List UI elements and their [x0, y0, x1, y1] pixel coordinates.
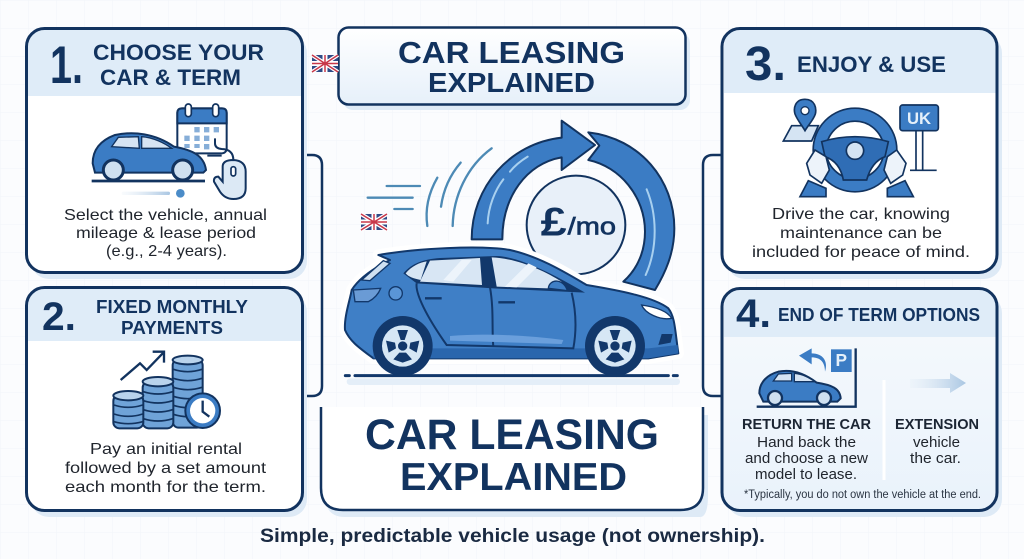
text: return the car option: and choose a new [745, 450, 868, 467]
text: return the car option: RETURN THE CAR [742, 416, 871, 433]
circular arrow [472, 121, 674, 290]
text: step 2 description: followed by a set amount [65, 460, 267, 477]
icon: car with calendar and mouse [92, 104, 246, 199]
heading: choose your car and term: CAR & TERM [100, 65, 241, 90]
car [345, 248, 678, 376]
icon: return car to parking [757, 348, 856, 407]
icon: return car to parking: P [836, 350, 847, 370]
panel 2: fixed monthly payments [26, 288, 307, 517]
payment circle: /mo [568, 214, 616, 241]
ground line [345, 376, 680, 385]
number 4: 4. [736, 292, 771, 336]
title box [338, 28, 690, 110]
text: step 3 description [752, 206, 970, 261]
title text: CAR LEASING [398, 35, 625, 70]
panel 3: enjoy and use [722, 28, 1002, 279]
illustration: car with monthly payment arrow [345, 121, 680, 385]
text: return the car option: Hand back the [757, 434, 856, 451]
title text: EXPLAINED [428, 67, 595, 98]
footnote: *Typically, you do not own the vehicle at the end. [744, 489, 981, 501]
heading: fixed monthly payments: FIXED MONTHLY [96, 297, 248, 317]
panel 4: end of term options [722, 288, 1002, 517]
panel 1: choose your car and term [26, 28, 307, 279]
lower title text [365, 411, 659, 499]
heading: enjoy and use: ENJOY & USE [797, 52, 946, 77]
icon: steering wheel with map pin and UK sign [783, 99, 938, 197]
heading: fixed monthly payments [96, 297, 248, 338]
text: step 1 description: mileage & lease period [76, 225, 256, 242]
connector: right bracket [703, 155, 722, 396]
text: step 3 description: Drive the car, knowing [772, 206, 950, 223]
heading: choose your car and term [93, 40, 264, 90]
text: step 2 description: each month for the term. [65, 479, 266, 496]
heading: end of term options: END OF TERM OPTIONS [778, 305, 980, 325]
text: extension option: the car. [910, 450, 961, 467]
lower title text: EXPLAINED [400, 456, 627, 499]
lower title box [321, 407, 708, 517]
payment circle [527, 176, 625, 274]
heading: fixed monthly payments: PAYMENTS [121, 318, 223, 338]
number 1: 1. [50, 36, 83, 95]
text: extension option: EXTENSION [895, 416, 979, 433]
text: return the car option: model to lease. [755, 466, 857, 483]
text: step 1 description [64, 207, 267, 260]
lower title text: CAR LEASING [365, 411, 659, 459]
tagline: Simple, predictable vehicle usage (not ownership). [260, 526, 765, 547]
number 3: 3. [745, 38, 786, 91]
text: extension option: vehicle [913, 434, 960, 451]
text: return the car option [742, 416, 871, 483]
icon: UK flag middle [361, 214, 387, 230]
text: step 1 description: (e.g., 2-4 years). [106, 243, 227, 260]
icon: extension arrow [910, 373, 966, 393]
connector: left bracket [302, 155, 322, 396]
text: step 1 description: Select the vehicle, annual [64, 207, 267, 224]
text: step 2 description: Pay an initial rental [90, 441, 242, 458]
icon: UK flag top [312, 55, 338, 72]
icon: steering wheel with map pin and UK sign: UK [907, 109, 931, 128]
text: extension option [895, 416, 979, 467]
motion lines [368, 148, 492, 226]
text: step 3 description: included for peace of mind. [752, 244, 970, 261]
title text [398, 35, 625, 98]
payment circle: £ [541, 200, 567, 244]
heading: choose your car and term: CHOOSE YOUR [93, 40, 264, 65]
text: step 2 description [65, 441, 267, 496]
text: step 3 description: maintenance can be [780, 225, 942, 242]
number 2: 2. [42, 295, 76, 339]
icon: coin stacks with arrow and clock [113, 352, 220, 428]
